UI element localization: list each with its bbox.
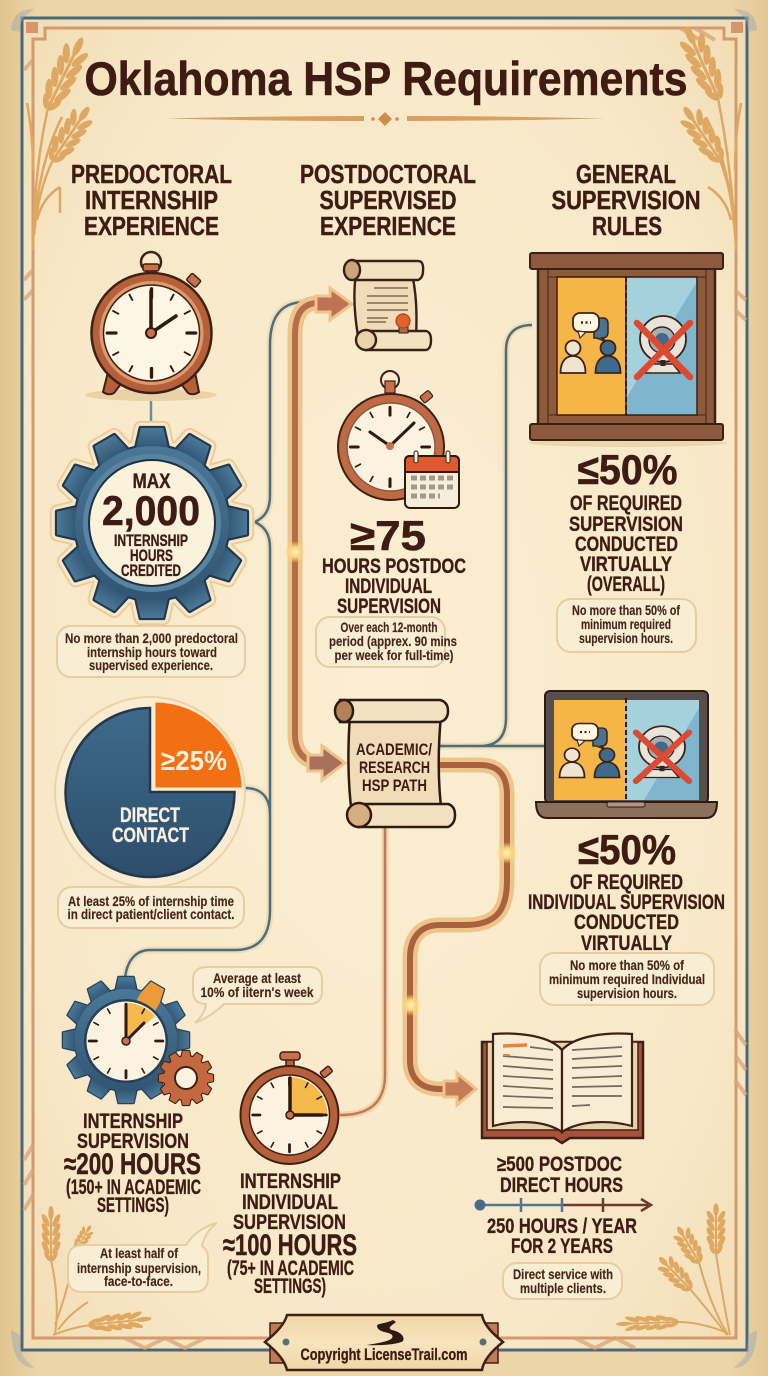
pie chart: direct contact: ≥25%	[161, 745, 227, 776]
heading: postdoctoral	[300, 159, 476, 241]
stat: 50% supervision virtual overall: (OVERALL)	[587, 573, 665, 596]
wheat decoration: bottom left	[40, 1206, 152, 1335]
slate connectors: predoctoral branch	[125, 302, 325, 980]
note: direct service: multiple clients.	[520, 1280, 606, 1296]
note: over each 12-month period: Over each 12-month	[340, 619, 438, 635]
wheat decoration: top left	[27, 31, 100, 250]
heading: postdoctoral: SUPERVISED	[320, 185, 456, 215]
text: internship supervision 200 hours: INTERNSHIP	[83, 1110, 183, 1133]
stat: 75 hours postdoc supervision: HOURS POSTDOC	[322, 555, 466, 578]
stat: 75 hours postdoc supervision: SUPERVISION	[337, 595, 441, 618]
note: minimum individual supervision: minimum required Individual	[549, 971, 705, 987]
icon: gear with max 2,000 hours: CREDITED	[121, 562, 181, 580]
note: 2,000 hours	[57, 626, 245, 677]
stat: 75 hours postdoc supervision	[322, 512, 466, 618]
icon: window with in-person versus virtual	[527, 253, 727, 447]
slate connectors: right branch	[440, 325, 545, 746]
stat: 50% individual supervision virtual: OF REQUIRED	[570, 871, 683, 894]
icon: academic research scroll: ACADEMIC/	[356, 740, 432, 759]
note: 2,000 hours: supervised experience.	[89, 657, 213, 673]
icon: stopwatch with calendar	[338, 371, 459, 508]
note: 2,000 hours: No more than 2,000 predoctoral	[65, 630, 238, 646]
icon: gears with clock	[63, 977, 213, 1105]
text: internship supervision 200 hours	[64, 1110, 201, 1217]
callout: face-to-face	[68, 1223, 217, 1292]
stat: 500 postdoc direct hours	[497, 1153, 623, 1197]
text: internship supervision 200 hours: (150+ IN ACADEMIC	[66, 1176, 201, 1199]
note: 2,000 hours: internship hours toward	[87, 644, 217, 660]
icon: stopwatch 100 hours	[240, 1052, 338, 1164]
icon: gear with max 2,000 hours: MAX	[132, 470, 170, 493]
icon: laptop with in-person versus virtual	[536, 691, 717, 818]
heading: general supervision: RULES	[592, 211, 662, 241]
timeline	[474, 1198, 651, 1212]
icon: gear with max 2,000 hours	[57, 428, 247, 618]
title divider	[165, 112, 605, 126]
note: minimum required supervision: minimum required	[581, 616, 671, 632]
wheat decoration: top right	[672, 20, 741, 250]
text: internship individual supervision 100 hours: INTERNSHIP	[240, 1170, 341, 1193]
stat: 500 postdoc direct hours: DIRECT HOURS	[500, 1174, 623, 1197]
stat: 50% supervision virtual overall	[569, 446, 683, 596]
stat: 75 hours postdoc supervision: INDIVIDUAL	[345, 575, 432, 598]
text: internship supervision 200 hours: SETTINGS)	[97, 1194, 169, 1217]
orange path: postdoctoral arrows	[284, 288, 352, 780]
callout: average 10%: 10% of iitern's week	[200, 984, 314, 1000]
heading: predoctoral: EXPERIENCE	[84, 211, 219, 241]
icon: diploma scroll	[344, 260, 431, 350]
connector: clock to gear	[150, 395, 152, 432]
text: internship individual supervision 100 hours: SUPERVISION	[233, 1211, 346, 1234]
icon: alarm clock	[85, 252, 217, 401]
text: internship individual supervision 100 hours: ≈100 HOURS	[223, 1229, 357, 1262]
note: direct service: Direct service with	[513, 1266, 613, 1282]
note: over each 12-month period	[316, 617, 457, 667]
stat: 50% individual supervision virtual	[528, 826, 725, 955]
note: minimum individual supervision: supervision hours.	[577, 985, 677, 1001]
stat: 50% supervision virtual overall: CONDUCTED	[575, 533, 678, 556]
text: internship supervision 200 hours: SUPERVISION	[77, 1130, 189, 1153]
heading: general supervision: GENERAL	[576, 159, 676, 189]
pie chart: direct contact: CONTACT	[112, 824, 189, 847]
title: Oklahoma HSP Requirements	[84, 52, 688, 105]
callout: face-to-face: At least half of	[100, 1245, 178, 1261]
heading: postdoctoral: POSTDOCTORAL	[300, 159, 476, 189]
stat: 50% individual supervision virtual: VIRTUALLY	[581, 932, 672, 955]
wheat decoration: bottom right	[616, 1203, 730, 1335]
text: internship individual supervision 100 hours: (75+ IN ACADEMIC	[227, 1257, 354, 1280]
note: minimum required supervision	[557, 599, 696, 652]
stat: 50% individual supervision virtual: CONDUCTED	[574, 911, 679, 934]
callout: face-to-face: face-to-face.	[104, 1273, 173, 1289]
connector: stopwatch to scroll	[340, 825, 385, 1115]
text: internship supervision 200 hours: ≈200 HOURS	[64, 1148, 201, 1181]
stat: 50% supervision virtual overall: SUPERVISION	[569, 513, 683, 536]
stat: 50% supervision virtual overall: OF REQUIRED	[570, 492, 682, 515]
note: direct contact	[58, 887, 244, 928]
stat: 50% individual supervision virtual: ≤50%	[578, 826, 676, 873]
stat: 500 postdoc direct hours: ≥500 POSTDOC	[497, 1153, 622, 1176]
icon: open book	[482, 1034, 643, 1143]
pie chart: direct contact	[55, 697, 245, 887]
heading: predoctoral: INTERNSHIP	[85, 185, 218, 215]
text: 250 hours per year	[487, 1215, 637, 1258]
icon: academic research scroll: HSP PATH	[362, 776, 427, 795]
note: minimum individual supervision	[540, 953, 714, 1005]
icon: gear with max 2,000 hours: 2,000	[102, 487, 200, 534]
text: 250 hours per year: 250 HOURS / YEAR	[487, 1215, 637, 1238]
stat: 75 hours postdoc supervision: ≥75	[350, 512, 426, 559]
heading: predoctoral: PREDOCTORAL	[71, 159, 232, 189]
icon: academic research scroll: RESEARCH	[359, 758, 430, 777]
note: direct service	[503, 1263, 622, 1299]
heading: general supervision	[552, 159, 700, 241]
text: internship individual supervision 100 hours: SETTINGS)	[254, 1275, 326, 1298]
note: minimum required supervision: No more than 50% of	[572, 602, 680, 618]
callout: face-to-face: internship supervision,	[77, 1260, 201, 1276]
note: over each 12-month period: per week for full-time)	[334, 647, 454, 663]
pie chart: direct contact: DIRECT	[120, 804, 180, 827]
note: minimum individual supervision: No more than 50% of	[570, 957, 684, 973]
footer copyright tag	[265, 1315, 503, 1370]
note: minimum required supervision: supervision hours.	[579, 630, 673, 646]
heading: general supervision: SUPERVISION	[552, 185, 700, 215]
icon: gear with max 2,000 hours: INTERNSHIP	[114, 532, 188, 550]
text: 250 hours per year: FOR 2 YEARS	[511, 1235, 613, 1258]
note: direct contact: At least 25% of internship time	[68, 893, 234, 909]
stat: 50% supervision virtual overall: ≤50%	[578, 446, 678, 493]
icon: academic research scroll	[335, 700, 455, 827]
text: internship individual supervision 100 hours	[223, 1170, 357, 1298]
footer copyright tag: Copyright LicenseTrail.com	[300, 1345, 468, 1364]
note: over each 12-month period: period (apprex. 90 mins	[329, 633, 457, 649]
callout: average 10%: Average at least	[213, 970, 301, 986]
text: internship individual supervision 100 hours: INDIVIDUAL	[242, 1191, 338, 1214]
note: direct contact: in direct patient/client contact.	[68, 906, 234, 922]
icon: gear with max 2,000 hours: HOURS	[130, 547, 173, 565]
callout: average 10%	[193, 967, 322, 1023]
heading: postdoctoral: EXPERIENCE	[320, 211, 456, 241]
stat: 50% supervision virtual overall: VIRTUALLY	[580, 553, 672, 576]
heading: predoctoral	[71, 159, 232, 241]
orange path: to book	[400, 765, 518, 1105]
